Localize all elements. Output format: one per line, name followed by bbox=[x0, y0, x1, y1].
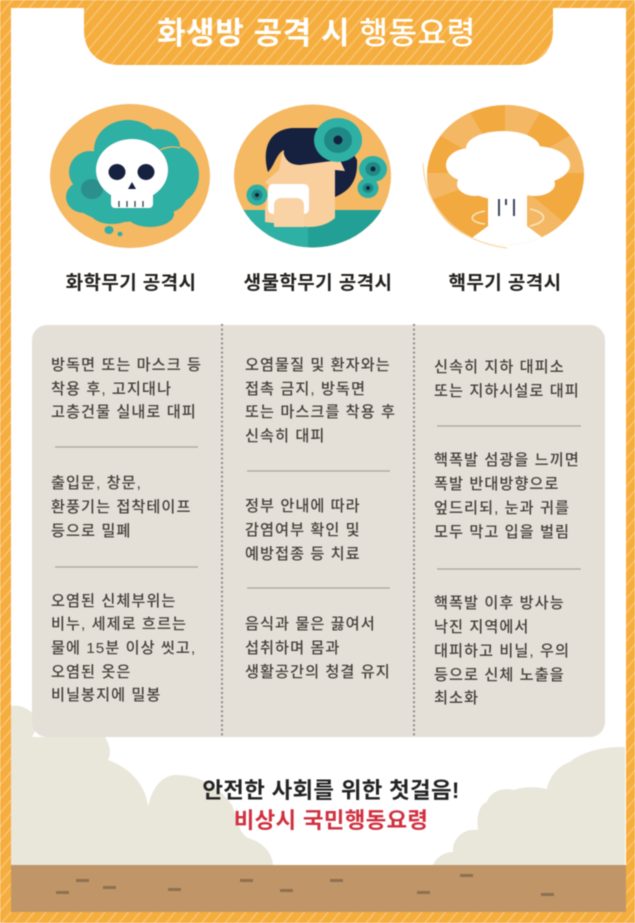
column: biological attack: 예방접종 등 치료 bbox=[245, 546, 361, 563]
ground bbox=[11, 865, 626, 912]
column: biological attack bbox=[245, 357, 396, 681]
column headings bbox=[66, 272, 561, 294]
icon: skull in toxic cloud bbox=[50, 104, 210, 248]
column: biological attack: 섭취하며 몸과 bbox=[245, 640, 340, 657]
closing message: 안전한 사회를 위한 첫걸음! bbox=[202, 778, 460, 803]
column: biological attack: 감염여부 확인 및 bbox=[245, 522, 361, 539]
column: nuclear attack: 폭발 반대방향으로 bbox=[434, 476, 559, 493]
closing message bbox=[202, 778, 460, 833]
column: biological attack: 오염물질 및 환자와는 bbox=[245, 357, 391, 374]
column: chemical attack: 비닐봉지에 밀봉 bbox=[51, 687, 161, 704]
panel: action guidelines bbox=[32, 324, 605, 738]
column: nuclear attack: 엎드리되, 눈과 귀를 bbox=[434, 500, 570, 517]
column: nuclear attack: 핵폭발 이후 방사능 bbox=[434, 595, 565, 612]
column: nuclear attack: 또는 지하시설로 대피 bbox=[434, 383, 580, 400]
column: chemical attack: 오염된 옷은 bbox=[51, 664, 131, 681]
column: chemical attack: 착용 후, 고지대나 bbox=[51, 381, 172, 398]
column: chemical attack: 물에 15분 이상 씻고, bbox=[51, 640, 196, 657]
column headings: 생물학무기 공격시 bbox=[244, 272, 392, 294]
column headings: 화학무기 공격시 bbox=[66, 272, 196, 294]
column: biological attack: 또는 마스크를 착용 후 bbox=[245, 404, 396, 421]
column: biological attack: 생활공간의 청결 유지 bbox=[245, 664, 391, 681]
column: biological attack: 음식과 물은 끓여서 bbox=[245, 616, 376, 633]
column: chemical attack: 방독면 또는 마스크 등 bbox=[51, 357, 202, 374]
column: chemical attack: 고층건물 실내로 대피 bbox=[51, 404, 197, 421]
title: 화생방 공격 시 행동요령 bbox=[157, 16, 476, 51]
icon: mushroom cloud bbox=[422, 104, 585, 249]
column: chemical attack bbox=[51, 357, 202, 704]
column: chemical attack: 출입문, 창문, bbox=[51, 475, 142, 492]
column: nuclear attack: 최소화 bbox=[434, 690, 479, 707]
column: nuclear attack: 신속히 지하 대피소 bbox=[434, 359, 565, 376]
column: biological attack: 정부 안내에 따라 bbox=[245, 498, 361, 515]
column: nuclear attack: 대피하고 비닐, 우의 bbox=[434, 643, 570, 660]
closing message: 비상시 국민행동요령 bbox=[234, 808, 428, 833]
title banner bbox=[84, 6, 553, 65]
column: biological attack: 신속히 대피 bbox=[245, 428, 325, 445]
column: nuclear attack: 낙진 지역에서 bbox=[434, 619, 529, 636]
column: chemical attack: 환풍기는 접착테이프 bbox=[51, 499, 191, 516]
column: nuclear attack: 핵폭발 섬광을 느끼면 bbox=[434, 452, 580, 469]
background clouds bbox=[11, 706, 625, 865]
column: chemical attack: 등으로 밀폐 bbox=[51, 523, 131, 540]
column: nuclear attack: 등으로 신체 노출을 bbox=[434, 667, 565, 684]
column: chemical attack: 오염된 신체부위는 bbox=[51, 593, 176, 610]
column: nuclear attack: 모두 막고 입을 벌림 bbox=[434, 524, 570, 541]
icon: masked person with germs bbox=[230, 104, 393, 250]
column headings: 핵무기 공격시 bbox=[449, 272, 561, 294]
germs bbox=[246, 118, 387, 206]
column: nuclear attack bbox=[434, 359, 580, 707]
column: biological attack: 접촉 금지, 방독면 bbox=[245, 381, 366, 398]
column: chemical attack: 비누, 세제로 흐르는 bbox=[51, 616, 187, 633]
